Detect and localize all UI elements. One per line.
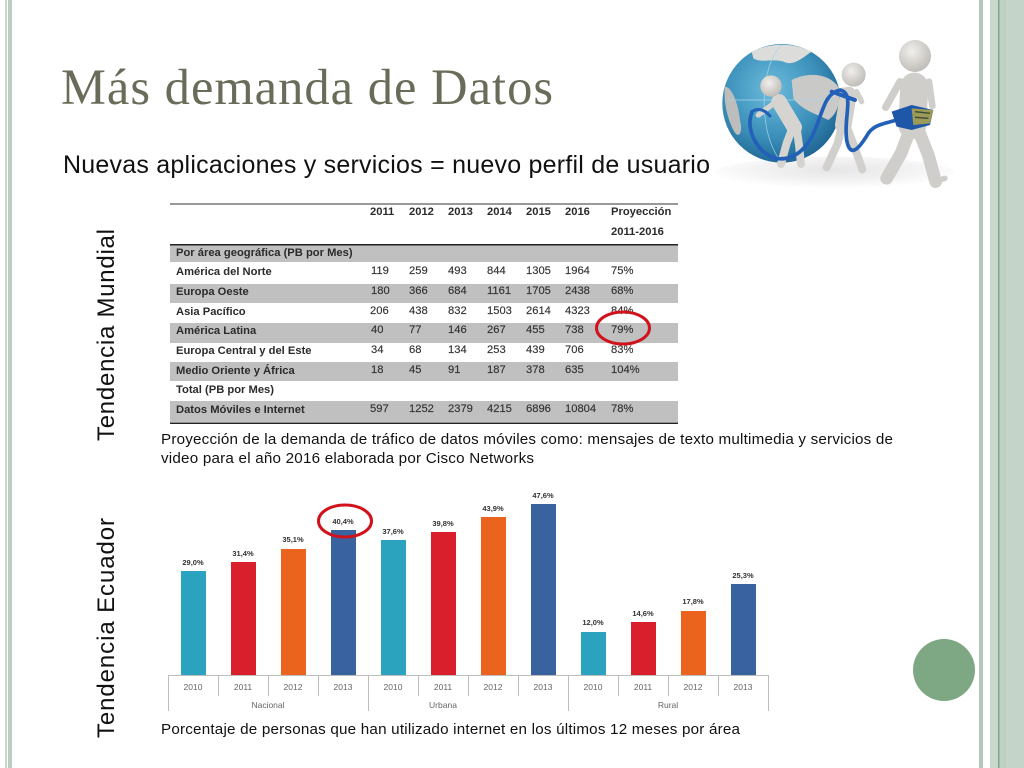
table header row: 2013 — [448, 206, 473, 218]
row: Europa Oeste: 1161 — [487, 285, 511, 297]
row: América del Norte: 75% — [611, 265, 633, 277]
table header row — [370, 206, 671, 238]
row: Datos Móviles e Internet: 78% — [611, 403, 633, 415]
illustration: people pulling a network cable around a globe — [715, 40, 955, 190]
table: data traffic projection — [170, 204, 678, 424]
year labels: 2013 — [734, 682, 753, 692]
row: Datos Móviles e Internet: Datos Móviles e Internet — [176, 404, 305, 416]
row: América Latina: 146 — [448, 324, 467, 336]
data labels: 31,4% — [232, 549, 254, 558]
table header row: 2011-2016 — [611, 226, 664, 238]
data labels: 39,8% — [432, 519, 454, 528]
row: América del Norte: 119 — [371, 265, 389, 277]
table header row: 2014 — [487, 206, 513, 218]
row: Europa Central y del Este: 439 — [526, 344, 545, 356]
row: América Latina: 455 — [526, 324, 545, 336]
year labels: 2010 — [184, 682, 203, 692]
year labels — [184, 682, 753, 692]
row: Datos Móviles e Internet — [176, 403, 633, 416]
row: Asia Pacífico: 84% — [611, 305, 633, 317]
row: América Latina: 77 — [409, 324, 421, 336]
row: Asia Pacífico — [176, 305, 633, 318]
row: América Latina — [176, 324, 633, 337]
row: Europa Oeste: 684 — [448, 285, 467, 297]
data labels: 29,0% — [182, 558, 204, 567]
row: Europa Oeste — [176, 285, 633, 298]
data labels — [182, 491, 754, 627]
table caption — [161, 431, 893, 467]
row: Asia Pacífico: 4323 — [565, 305, 590, 317]
row: Europa Central y del Este: 253 — [487, 344, 506, 356]
decorative green circle — [913, 639, 975, 701]
row: Europa Central y del Este: 68 — [409, 344, 421, 356]
row: Datos Móviles e Internet: 4215 — [487, 403, 512, 415]
icon: cable plug — [892, 105, 933, 130]
row: Europa Oeste: 1705 — [526, 285, 551, 297]
row: Europa Central y del Este — [176, 344, 633, 357]
year labels: 2012 — [484, 682, 503, 692]
icon: figure right — [886, 40, 945, 182]
row: Medio Oriente y África: 45 — [409, 364, 421, 376]
row: Europa Central y del Este: Europa Central y del Este — [176, 345, 312, 357]
row: Medio Oriente y África: 378 — [526, 364, 545, 376]
row: Asia Pacífico: 2614 — [526, 305, 551, 317]
row: Medio Oriente y África: 187 — [487, 364, 506, 376]
axis lines and ticks — [168, 675, 768, 711]
row group heading: total: Total (PB por Mes) — [176, 384, 274, 396]
data labels: 40,4% — [332, 517, 354, 526]
row: Europa Central y del Este: 83% — [611, 344, 633, 356]
area labels: Rural — [658, 700, 678, 710]
year labels: 2010 — [584, 682, 603, 692]
row: Medio Oriente y África: 635 — [565, 364, 584, 376]
area labels — [251, 700, 678, 710]
area labels: Urbana — [429, 700, 457, 710]
row: Medio Oriente y África: Medio Oriente y África — [176, 364, 296, 377]
row: América del Norte: 844 — [487, 265, 506, 277]
year labels: 2011 — [234, 682, 252, 692]
row: Datos Móviles e Internet: 10804 — [565, 403, 596, 415]
year labels: 2011 — [634, 682, 652, 692]
data labels: 47,6% — [532, 491, 554, 500]
rotated label: Tendencia Ecuador: Tendencia Ecuador — [93, 518, 120, 738]
row: América del Norte: 259 — [409, 265, 428, 277]
callout: red ellipse on 79% — [596, 312, 650, 344]
chart caption: Porcentaje de personas que han utilizado internet en los últimos 12 meses por área — [161, 721, 741, 738]
table header row: 2015 — [526, 206, 551, 218]
left border stripes — [5, 0, 12, 768]
table header row: 2011 — [370, 206, 394, 218]
bar chart: internet use by area — [168, 491, 768, 711]
row: Medio Oriente y África — [176, 364, 640, 377]
subtitle: Nuevas aplicaciones y servicios = nuevo perfil de usuario — [63, 151, 710, 179]
row: Asia Pacífico: Asia Pacífico — [176, 306, 246, 318]
year labels: 2012 — [284, 682, 303, 692]
row: América del Norte: 1305 — [526, 265, 551, 277]
data labels: 43,9% — [482, 504, 504, 513]
row: América Latina: 267 — [487, 324, 506, 336]
year labels: 2010 — [384, 682, 403, 692]
row: Medio Oriente y África: 104% — [611, 364, 640, 376]
year labels: 2013 — [334, 682, 353, 692]
row: Datos Móviles e Internet: 6896 — [526, 403, 551, 415]
rotated label: Tendencia Mundial: Tendencia Mundial — [93, 229, 120, 441]
data labels: 17,8% — [682, 597, 704, 606]
row: América Latina: 738 — [565, 324, 584, 336]
row: América del Norte: América del Norte — [176, 266, 272, 278]
row: Asia Pacífico: 832 — [448, 305, 467, 317]
icon: figure middle — [827, 63, 866, 169]
icon: blue cable — [750, 90, 902, 159]
row: Europa Oeste: 2438 — [565, 285, 590, 297]
bars — [181, 504, 756, 675]
icon: globe — [722, 44, 841, 163]
table caption: video para el año 2016 elaborada por Cisco Networks — [161, 450, 534, 467]
row: América del Norte: 1964 — [565, 265, 590, 277]
data labels: 35,1% — [282, 535, 304, 544]
row: Europa Oeste: Europa Oeste — [176, 286, 249, 298]
data labels: 12,0% — [582, 618, 604, 627]
row: Datos Móviles e Internet: 2379 — [448, 403, 473, 415]
table header row: 2016 — [565, 206, 590, 218]
row: Europa Oeste: 180 — [371, 285, 390, 297]
table header row: Proyección — [611, 206, 671, 218]
year labels: 2011 — [434, 682, 452, 692]
row: Europa Oeste: 366 — [409, 285, 428, 297]
row: Europa Central y del Este: 134 — [448, 344, 467, 356]
title: Más demanda de Datos — [61, 59, 553, 115]
data labels: 25,3% — [732, 571, 754, 580]
year labels: 2013 — [534, 682, 553, 692]
row: América Latina: 40 — [371, 324, 383, 336]
area labels: Nacional — [251, 700, 285, 710]
data labels: 37,6% — [382, 527, 404, 536]
row: América Latina: 79% — [611, 324, 633, 336]
row group heading: Por área geográfica (PB por Mes) — [176, 247, 353, 259]
callout: red ellipse on 40,4% — [318, 505, 372, 537]
right border stripes — [979, 0, 1024, 768]
row: Europa Central y del Este: 34 — [371, 344, 383, 356]
row: Europa Central y del Este: 706 — [565, 344, 584, 356]
row: Asia Pacífico: 438 — [409, 305, 428, 317]
data labels: 14,6% — [632, 609, 654, 618]
table caption: Proyección de la demanda de tráfico de datos móviles como: mensajes de texto multimedia y servicios de — [161, 431, 893, 448]
row: Datos Móviles e Internet: 1252 — [409, 403, 434, 415]
row: Medio Oriente y África: 18 — [371, 364, 383, 376]
row: Datos Móviles e Internet: 597 — [370, 403, 389, 415]
row: Asia Pacífico: 1503 — [487, 305, 512, 317]
row: América del Norte — [176, 265, 633, 278]
row: Medio Oriente y África: 91 — [448, 364, 460, 376]
row: Europa Oeste: 68% — [611, 285, 633, 297]
row: América Latina: América Latina — [176, 325, 257, 337]
row: América del Norte: 493 — [448, 265, 467, 277]
year labels: 2012 — [684, 682, 703, 692]
icon: figure left — [758, 75, 801, 164]
row: Asia Pacífico: 206 — [370, 305, 389, 317]
floor shadow — [715, 157, 955, 190]
table header row: 2012 — [409, 206, 434, 218]
